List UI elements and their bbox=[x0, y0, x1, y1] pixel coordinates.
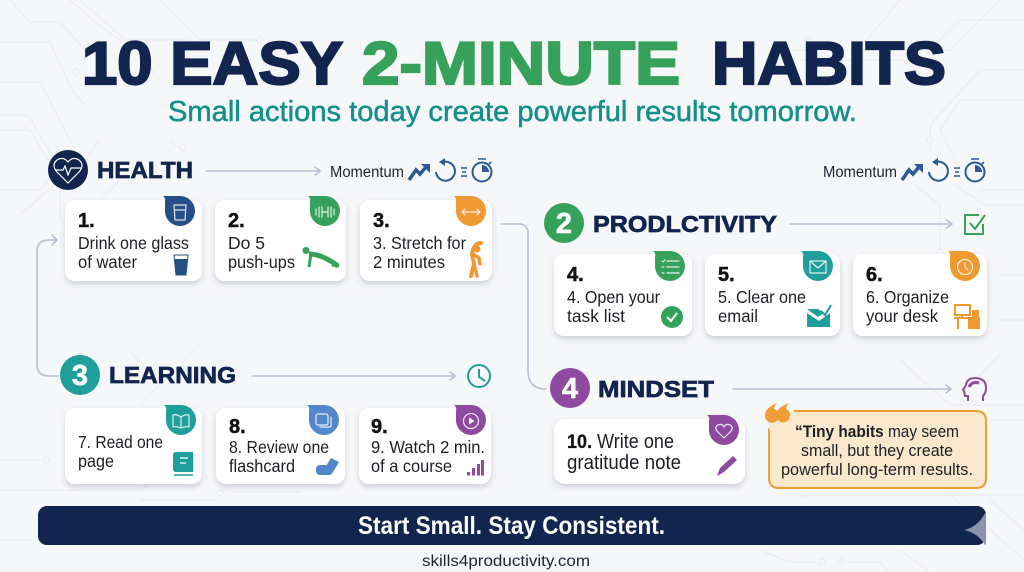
icon: glass of water bbox=[174, 255, 188, 275]
sparkle bbox=[964, 513, 986, 545]
card 1: of water bbox=[78, 252, 137, 272]
card 4: 4. Open your bbox=[567, 287, 660, 307]
quote text bbox=[781, 422, 973, 479]
icon: stretching figure bbox=[471, 243, 481, 276]
card 8: flashcard bbox=[229, 456, 295, 476]
title: HABITS bbox=[712, 30, 946, 97]
card 1 bbox=[65, 196, 202, 281]
card 6 bbox=[853, 251, 987, 336]
quote text: small, but they create bbox=[801, 441, 953, 460]
card 4: task list bbox=[567, 306, 625, 326]
section: mindset header bbox=[550, 368, 986, 408]
card 5: email bbox=[718, 306, 758, 326]
quote mark bbox=[765, 403, 790, 423]
card 2: push-ups bbox=[228, 252, 295, 272]
icon: book bbox=[173, 452, 193, 475]
card 1: Drink one glass bbox=[78, 233, 189, 253]
card 1: 1. bbox=[78, 210, 95, 232]
icon: desk bbox=[954, 305, 980, 329]
connector: learning back to health bbox=[37, 235, 58, 376]
card 7 bbox=[65, 405, 202, 484]
number 4 bbox=[550, 368, 590, 408]
arrow bbox=[733, 385, 951, 393]
arrow bbox=[790, 220, 952, 228]
section: productivity header bbox=[544, 203, 985, 243]
icon: pencil bbox=[717, 456, 737, 476]
card 10: Write one bbox=[597, 431, 674, 453]
number 3: 3 bbox=[72, 360, 88, 392]
card 7: 7. Read one bbox=[78, 432, 163, 452]
card 10: 10. bbox=[567, 431, 592, 453]
banner: Start Small. Stay Consistent. bbox=[358, 512, 665, 540]
card 8 bbox=[216, 405, 345, 484]
card 9: 9. Watch 2 min. bbox=[371, 437, 485, 457]
icons: momentum bbox=[409, 158, 492, 182]
badge: envelope bbox=[801, 251, 833, 281]
card 2: 2. bbox=[228, 210, 245, 232]
card 5: 5. Clear one bbox=[718, 287, 806, 307]
quote text: “Tiny habits may seem bbox=[795, 422, 959, 441]
card 9 bbox=[359, 405, 491, 484]
badge: clock bbox=[948, 251, 980, 281]
icon: check circle bbox=[661, 306, 683, 328]
card 9: 9. bbox=[371, 416, 388, 438]
number 2: 2 bbox=[556, 208, 572, 240]
heading: productivity: PRODLCTIVITY bbox=[593, 211, 777, 237]
card 10: gratitude note bbox=[567, 452, 681, 474]
icon: email with check bbox=[807, 305, 831, 327]
card 2 bbox=[215, 196, 346, 281]
section: health header bbox=[48, 150, 492, 190]
card 4: 4. bbox=[567, 264, 584, 286]
icon: head bbox=[963, 378, 986, 401]
card 5: 5. bbox=[718, 264, 735, 286]
subtitle: Small actions today create powerful results tomorrow. bbox=[168, 96, 857, 128]
title: 2-MINUTE bbox=[362, 30, 680, 97]
badge: stretch arrows bbox=[454, 196, 486, 226]
badge: open book bbox=[164, 405, 196, 435]
card 6: your desk bbox=[866, 306, 938, 326]
callout: quote bbox=[765, 403, 986, 488]
card 4 bbox=[554, 251, 692, 336]
card 6: 6. bbox=[866, 264, 883, 286]
icon: heart pulse bbox=[48, 150, 88, 190]
card 5 bbox=[705, 251, 840, 336]
heading: health: HEALTH bbox=[97, 157, 193, 183]
badge: glass bbox=[163, 196, 195, 226]
badge: dumbbell bbox=[308, 196, 340, 226]
icon: checkbox bbox=[965, 215, 985, 234]
card 8: 8. bbox=[229, 416, 246, 438]
momentum label: Momentum bbox=[823, 164, 897, 181]
arrow bbox=[206, 167, 320, 175]
icon: bars bbox=[467, 460, 484, 476]
title: 10 EASY bbox=[82, 30, 343, 97]
heading: learning: LEARNING bbox=[109, 362, 236, 388]
card 10 bbox=[554, 415, 745, 484]
quote text: powerful long-term results. bbox=[781, 460, 973, 479]
card 3: 3. Stretch for bbox=[373, 233, 466, 253]
card 8: 8. Review one bbox=[229, 437, 329, 457]
momentum row right bbox=[823, 158, 984, 182]
section: learning header bbox=[60, 355, 490, 395]
card 9: of a course bbox=[371, 456, 452, 476]
banner bbox=[38, 506, 986, 545]
card 3: 2 minutes bbox=[373, 252, 445, 272]
number 3 bbox=[60, 355, 100, 395]
icon: clock bbox=[468, 365, 490, 387]
heading: mindset: MINDSET bbox=[598, 376, 714, 402]
icons: momentum bbox=[902, 158, 984, 182]
card 3: 3. bbox=[373, 210, 390, 232]
icon: flashcard bbox=[316, 458, 339, 475]
momentum label: Momentum bbox=[330, 164, 404, 181]
arrow bbox=[252, 372, 455, 380]
icon: push-up figure bbox=[302, 247, 339, 267]
number 4: 4 bbox=[562, 373, 578, 405]
card 3 bbox=[360, 196, 492, 281]
card 2: Do 5 bbox=[228, 233, 265, 253]
connector: health to productivity flow bbox=[501, 224, 546, 389]
title bbox=[82, 30, 946, 97]
badge: flashcards bbox=[307, 405, 339, 435]
card 7: page bbox=[78, 451, 114, 471]
badge: play bbox=[454, 405, 486, 435]
badge: checklist bbox=[653, 251, 685, 281]
footer url: skills4productivity.com bbox=[422, 553, 590, 570]
card 6: 6. Organize bbox=[866, 287, 949, 307]
badge: heart bbox=[707, 415, 739, 445]
number 2 bbox=[544, 203, 584, 243]
